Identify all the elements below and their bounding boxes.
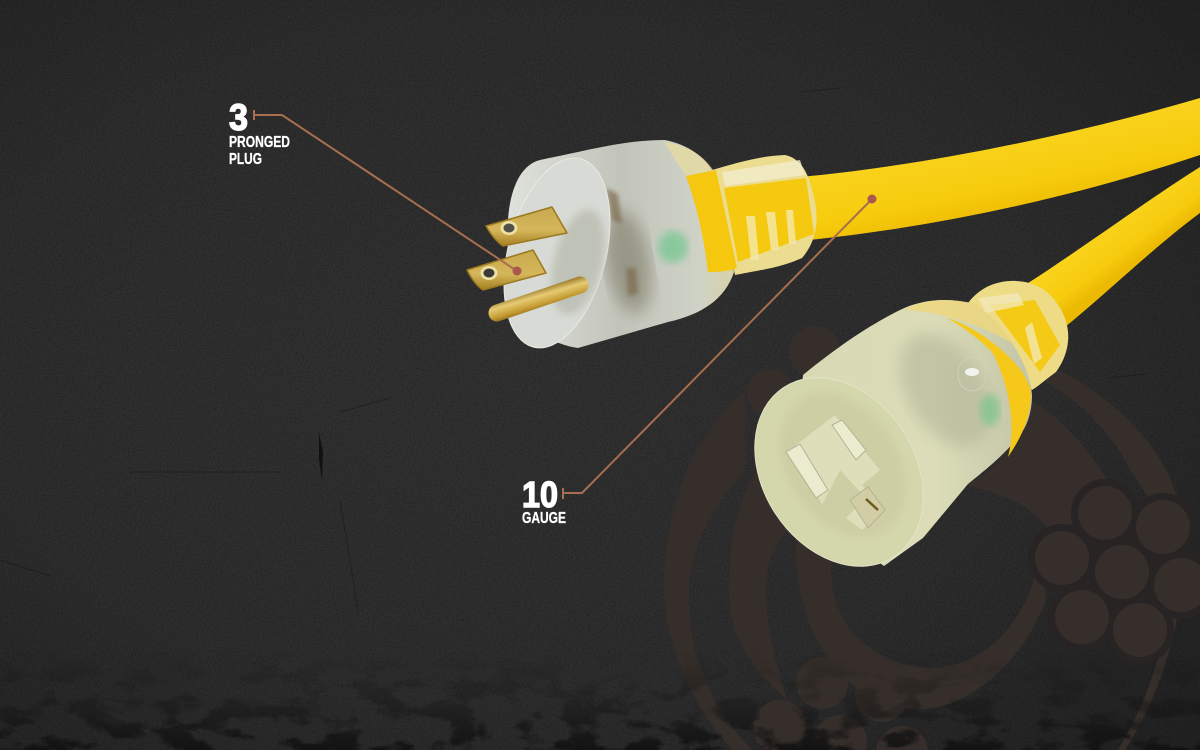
label: GAUGE: GAUGE [522,510,566,527]
logo wire halo [1028,479,1200,664]
plug [467,140,817,359]
label: PRONGED PLUG [229,134,290,168]
leader line to cable [563,199,872,499]
logo swoosh: right outer ring [1036,362,1183,750]
logo swoosh: inner right [962,400,1118,535]
callout: 10 gauge [522,194,876,527]
socket frosted section [881,317,1009,463]
logo swoosh: inner left [729,462,790,700]
plug upper yellow tint [664,142,713,176]
label: PRONGED PLUG: PLUG [229,151,262,168]
leader end dot [868,194,876,204]
socket yellow band [947,318,1031,457]
socket clear body [790,300,1032,566]
leader end dot [512,266,522,276]
plug face [486,147,628,359]
number 10: 10 [522,474,558,515]
prong: upper blade [486,207,567,246]
prong: round ground pin [497,285,580,313]
callout: 3 pronged plug [229,97,522,276]
yellow cable: lower [1025,167,1200,335]
plug clear body [508,140,734,348]
prong: middle blade [467,250,546,290]
plug strain relief [712,155,817,275]
socket [720,281,1068,598]
logo swoosh: outer left [664,392,752,750]
logo wire strand circles [747,326,1200,750]
yellow cable: upper [800,98,1200,240]
socket top yellow tint [905,300,1015,345]
socket contact slots [786,415,885,530]
socket face [720,346,958,598]
leader line to prong [254,110,517,271]
socket strain relief [966,281,1068,390]
background logo watermark [664,326,1200,750]
plug dark interior and green glow [597,188,688,317]
number 3: 3 [229,97,248,138]
bottom grunge texture [0,684,1200,750]
logo swoosh: lower ring [796,533,1046,710]
label: PRONGED PLUG: PRONGED [229,134,290,151]
plug yellow band [686,170,737,272]
